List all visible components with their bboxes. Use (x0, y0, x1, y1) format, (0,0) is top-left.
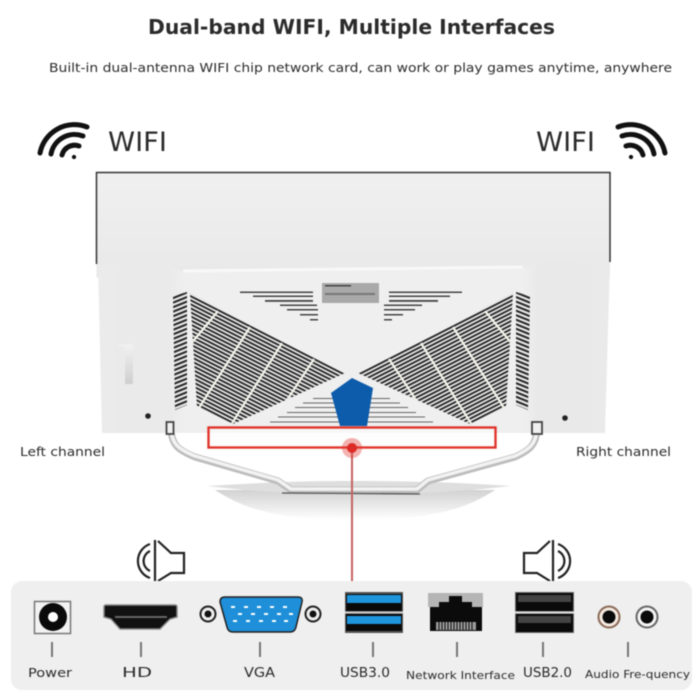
icon: power port (34, 602, 70, 634)
blue badge (331, 378, 373, 426)
port labels: USB2.0 (523, 666, 572, 681)
subtitle: Built-in dual-antenna WIFI chip network card, can work or play games anytime, anywhere (49, 61, 672, 75)
icon: wifi right (618, 125, 665, 158)
port labels: Network Interface (406, 669, 515, 682)
icon: speaker right (524, 540, 570, 581)
icon: network port (428, 593, 483, 631)
icon: speaker left (138, 540, 184, 581)
port labels (28, 666, 691, 682)
icon: wifi left (40, 125, 87, 158)
label plate (322, 283, 379, 303)
label: right channel: Right channel (576, 445, 671, 459)
monitor back (96, 172, 610, 434)
red highlight box (208, 428, 496, 448)
stand arm (171, 429, 537, 494)
icon: audio jacks (598, 606, 658, 628)
port labels: USB3.0 (340, 666, 390, 681)
icon: vga port (200, 597, 320, 632)
icon: usb 3.0 port (345, 592, 403, 633)
icon: usb 2.0 port (515, 592, 574, 633)
label: wifi right: WIFI (536, 127, 595, 158)
label: wifi left: WIFI (108, 127, 167, 158)
red connector (342, 438, 362, 581)
rear housing (98, 262, 610, 433)
port labels: Audio Fre-quency (585, 668, 691, 681)
screen back panel (96, 172, 610, 278)
label: left channel: Left channel (20, 445, 105, 459)
port labels: Power (28, 666, 72, 680)
title: Dual-band WIFI, Multiple Interfaces (148, 15, 555, 39)
left vent (170, 288, 350, 428)
icon: hdmi port (104, 605, 177, 629)
port labels: VGA (244, 666, 275, 681)
stand base (207, 481, 510, 520)
stand clips (166, 422, 542, 434)
side slot (117, 344, 133, 384)
panel: interfaces (11, 581, 692, 690)
port tick marks (52, 642, 628, 657)
port labels: HD (122, 666, 152, 681)
right vent (353, 288, 533, 428)
screw holes (145, 413, 568, 421)
